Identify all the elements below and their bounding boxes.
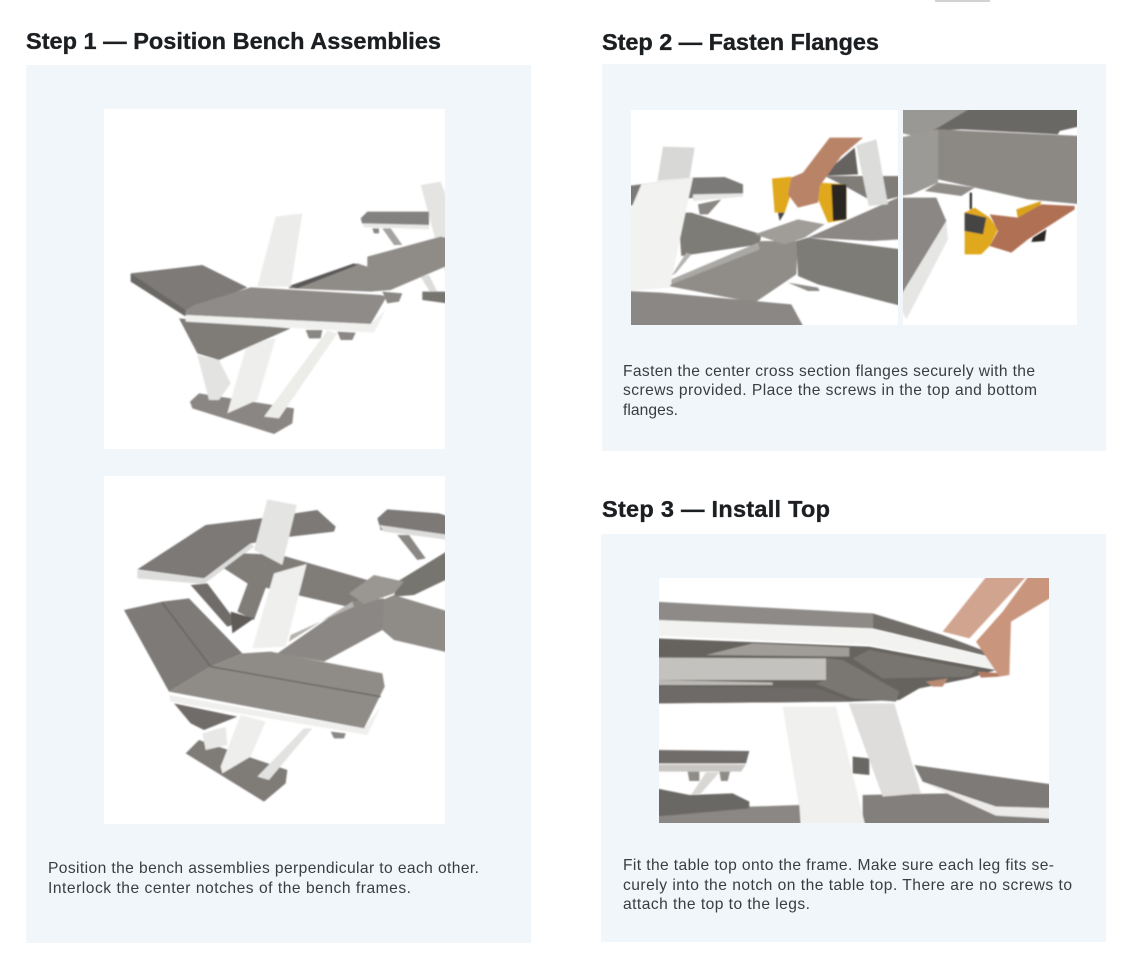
photo: interlocked bench assemblies [104, 476, 449, 824]
step 3 description: curely into the notch on the table top. There are no screws to [623, 877, 1072, 894]
heading: step 3: Step 3 — Install Top [602, 496, 830, 522]
step 3 description: Fit the table top onto the frame. Make sure each leg fits se- [623, 857, 1054, 874]
step 2 description: flanges. [623, 402, 678, 419]
photo: drilling bottom flange [900, 106, 1081, 325]
photo: drilling top flange [628, 110, 901, 328]
step 3 description: attach the top to the legs. [623, 896, 810, 913]
icon: arm and drill [772, 138, 863, 223]
panel: step 2 [602, 64, 1106, 451]
step 1 description: Interlock the center notches of the bench frames. [48, 880, 411, 897]
heading: step 2: Step 2 — Fasten Flanges [602, 29, 879, 55]
panel: step 1 [26, 65, 531, 943]
step 1 description: Position the bench assemblies perpendicular to each other. [48, 860, 479, 877]
step 2 description: Fasten the center cross section flanges securely with the [623, 363, 1035, 380]
photo: bench assembly single [104, 109, 449, 449]
icon: hand and drill [965, 193, 1075, 254]
panel: step 3 [601, 534, 1106, 942]
heading: step 1: Step 1 — Position Bench Assemblies [26, 28, 441, 54]
step 2 description: screws provided. Place the screws in the top and bottom [623, 382, 1037, 399]
icon: hands [976, 575, 1053, 677]
photo: installing table top [656, 575, 1056, 828]
